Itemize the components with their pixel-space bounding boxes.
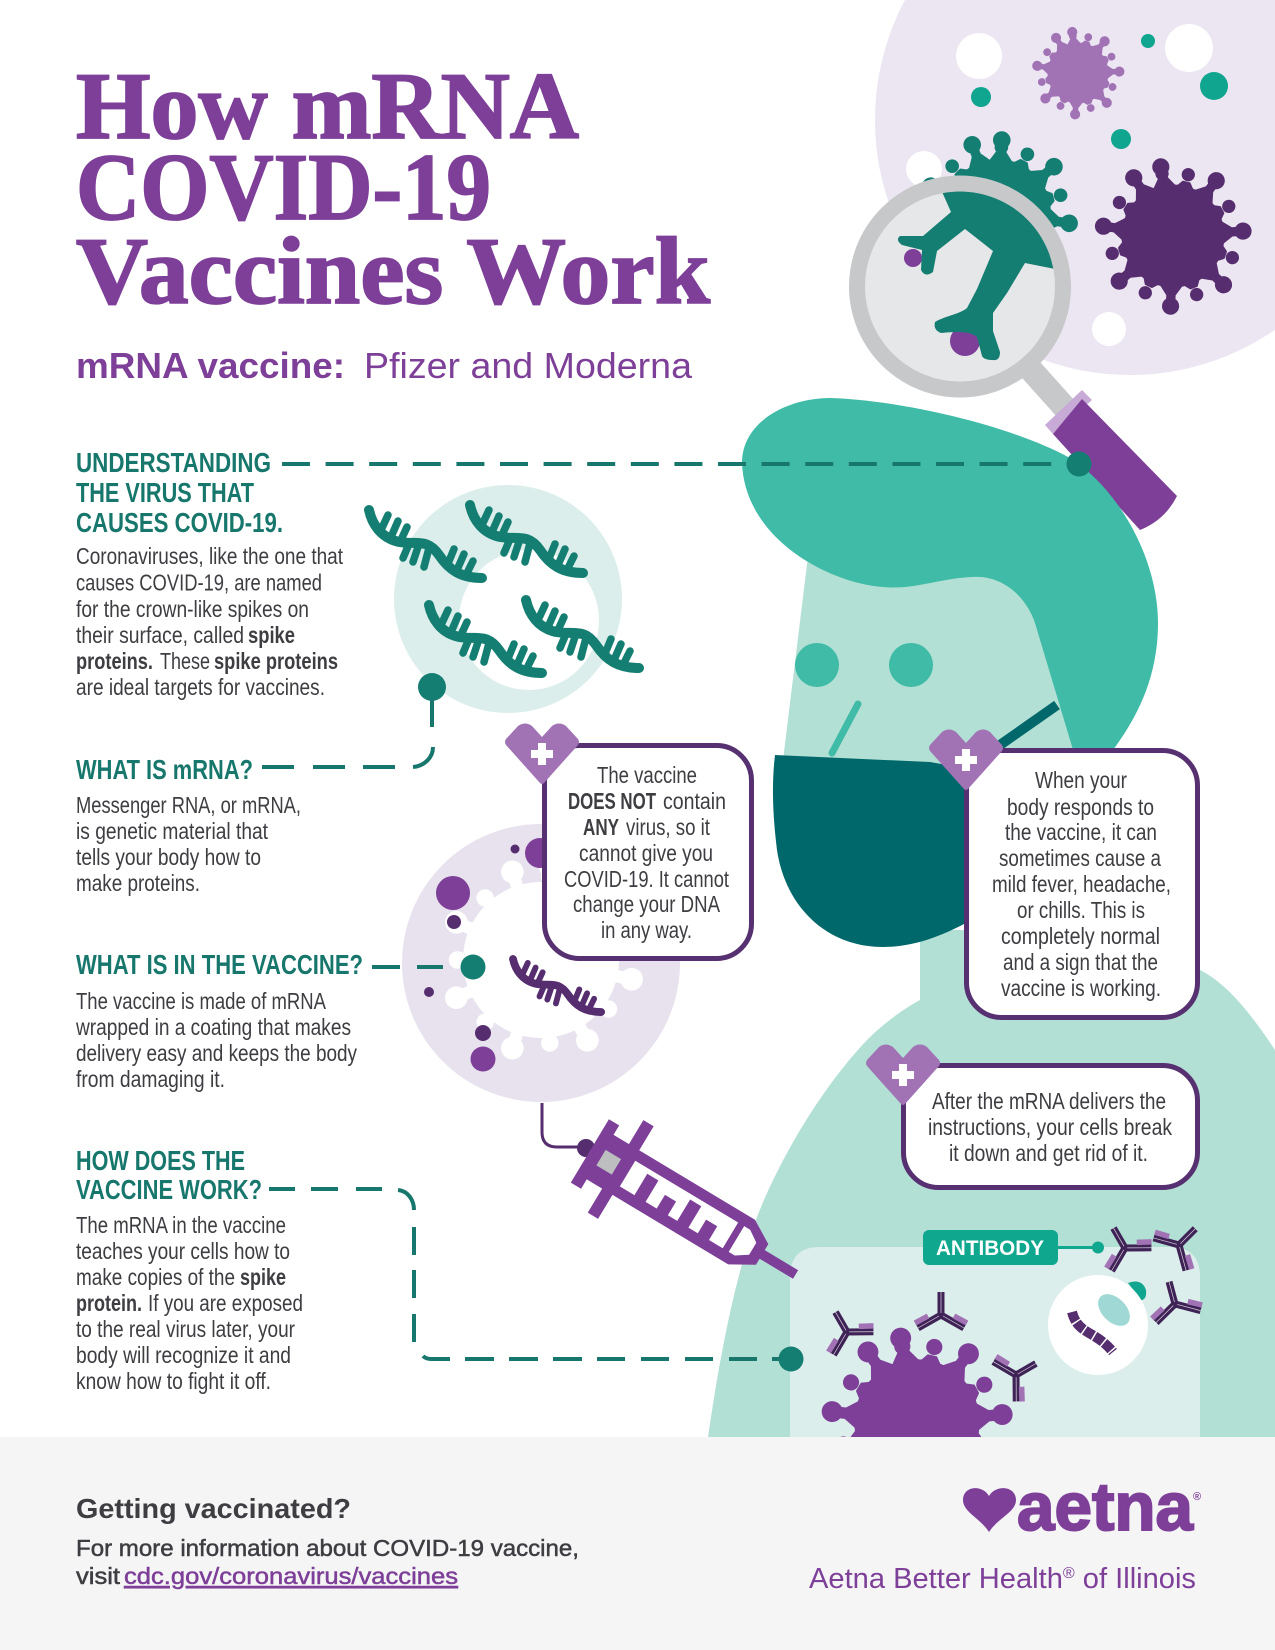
callout text: body responds to — [1007, 794, 1154, 820]
callout text — [992, 767, 1171, 1001]
title — [76, 53, 710, 324]
heading: UNDERSTANDING — [76, 447, 271, 478]
icon: cell with broken mRNA — [1048, 1275, 1148, 1375]
callout text: in any way. — [601, 917, 692, 943]
footer text: visit — [76, 1563, 121, 1589]
callout text: COVID-19. It cannot — [564, 866, 729, 892]
callout text: mild fever, headache, — [992, 871, 1171, 897]
callout text: completely normal — [1001, 923, 1160, 949]
illustration: vaccine particle cell — [402, 824, 680, 1102]
icon: antibody — [915, 1292, 967, 1328]
icon: antibody — [1091, 1215, 1154, 1272]
footer — [0, 1437, 1275, 1650]
body text: spike proteins — [214, 648, 338, 674]
footer text: cdc.gov/coronavirus/vaccines — [124, 1563, 458, 1589]
callout text: cannot give you — [579, 840, 713, 866]
body — [708, 930, 1275, 1437]
icon: heart with cross — [505, 724, 579, 784]
callout text: instructions, your cells break — [928, 1114, 1172, 1140]
body text: for the crown-like spikes on — [76, 596, 309, 622]
body text: teaches your cells how to — [76, 1238, 290, 1264]
magnifier behind hair — [857, 184, 1177, 530]
title: Vaccines Work — [76, 218, 710, 324]
heading: VACCINE WORK? — [76, 1174, 262, 1205]
body text: These — [160, 648, 210, 674]
heading: HOW DOES THE — [76, 1145, 245, 1176]
section: what is mRNA — [76, 754, 301, 896]
organization name: ® — [1063, 1565, 1075, 1582]
icon: purple virus at bottom — [804, 1309, 1031, 1536]
callout text: When your — [1035, 767, 1127, 793]
callout text: sometimes cause a — [999, 845, 1161, 871]
body text: from damaging it. — [76, 1066, 225, 1092]
body text: make copies of the — [76, 1264, 235, 1290]
body text: protein. — [76, 1290, 142, 1316]
body text: make proteins. — [76, 870, 200, 896]
heading — [76, 1145, 262, 1205]
illustration: mRNA strands in circle — [369, 485, 639, 713]
body text: Coronaviruses, like the one that — [76, 543, 343, 569]
callout text: ANY — [583, 814, 619, 840]
figure: person with mask — [708, 184, 1275, 1437]
hair — [742, 398, 1158, 750]
subtitle — [76, 345, 693, 386]
callout text — [564, 762, 729, 943]
section: understanding the virus — [76, 447, 343, 700]
eyes — [795, 643, 933, 687]
callout text: virus, so it — [626, 814, 710, 840]
heading: WHAT IS mRNA? — [76, 754, 253, 785]
background circle: lavender virus field — [875, 0, 1275, 375]
callout text: vaccine is working. — [1001, 975, 1161, 1001]
callout text: DOES NOT — [568, 788, 656, 814]
body text: The mRNA in the vaccine — [76, 1212, 286, 1238]
body text: spike — [240, 1264, 286, 1290]
body text: are ideal targets for vaccines. — [76, 674, 325, 700]
nose — [832, 704, 858, 753]
body text: their surface, called — [76, 622, 244, 648]
subtitle: mRNA vaccine: — [76, 345, 345, 386]
connector: how does the vaccine work dashed line — [269, 1189, 804, 1372]
mask strap — [1000, 705, 1057, 745]
icon: syringe — [562, 1105, 823, 1321]
body text: is genetic material that — [76, 818, 268, 844]
aetna logo: aetna — [1017, 1469, 1194, 1545]
callout text: change your DNA — [573, 891, 721, 917]
body text: delivery easy and keeps the body — [76, 1040, 357, 1066]
heading: WHAT IS IN THE VACCINE? — [76, 949, 363, 980]
heading: THE VIRUS THAT — [76, 477, 254, 508]
callout text: it down and get rid of it. — [949, 1140, 1148, 1166]
body text — [76, 792, 301, 896]
callout text: After the mRNA delivers the — [932, 1088, 1166, 1114]
section: what is in the vaccine — [75, 949, 363, 1092]
heading — [76, 447, 283, 538]
footer heading: Getting vaccinated? — [76, 1493, 351, 1524]
callout text: contain — [663, 788, 726, 814]
subtitle: Pfizer and Moderna — [364, 345, 693, 386]
footer text — [76, 1535, 579, 1589]
title: COVID-19 — [76, 134, 491, 240]
face — [783, 540, 1100, 850]
connector: what is mRNA dashed line — [262, 673, 446, 767]
connector: cell to syringe — [542, 1103, 595, 1157]
callout text: or chills. This is — [1017, 897, 1145, 923]
body text — [76, 543, 343, 700]
body text: If you are exposed — [148, 1290, 303, 1316]
organization name: of Illinois — [1075, 1563, 1196, 1595]
body text: to the real virus later, your — [76, 1316, 295, 1342]
body text: causes COVID-19, are named — [76, 570, 322, 596]
body text — [76, 1212, 303, 1394]
callout text: the vaccine, it can — [1005, 819, 1157, 845]
inner arm panel — [790, 1247, 1200, 1437]
callout: cells break it down — [866, 1044, 1198, 1188]
icon: heart with cross — [929, 730, 1003, 790]
aetna logo: ® — [1193, 1491, 1201, 1503]
heading: CAUSES COVID-19. — [76, 507, 283, 538]
callout text: The vaccine — [597, 762, 697, 788]
callout: does not contain virus — [505, 724, 752, 958]
connector: understanding dashed line — [282, 452, 1092, 476]
icon: antibody — [813, 1299, 876, 1356]
label: antibody: ANTIBODY — [936, 1237, 1044, 1260]
footer text: For more information about COVID-19 vaccine, — [76, 1535, 579, 1561]
callout text — [928, 1088, 1172, 1166]
icon: antibody — [1144, 1275, 1203, 1323]
face mask — [773, 755, 975, 947]
callout text: and a sign that the — [1003, 949, 1158, 975]
body text: tells your body how to — [76, 844, 261, 870]
label: antibody — [923, 1230, 1104, 1265]
body text: body will recognize it and — [76, 1342, 291, 1368]
title: How mRNA — [76, 53, 579, 159]
body text: spike — [248, 622, 295, 648]
icon: antibody — [992, 1341, 1049, 1404]
icon: dark purple virus — [1081, 145, 1265, 328]
callout: body response — [929, 730, 1198, 1018]
organization name: Aetna Better Health — [809, 1563, 1062, 1595]
body text: wrapped in a coating that makes — [75, 1014, 351, 1040]
body text: proteins. — [76, 648, 153, 674]
icon: antibody — [1151, 1210, 1214, 1273]
body text: The vaccine is made of mRNA — [76, 988, 327, 1014]
body text — [75, 988, 357, 1092]
icon: teal virus — [913, 127, 1084, 298]
icon: light purple virus — [1025, 20, 1131, 126]
body text: Messenger RNA, or mRNA, — [76, 792, 301, 818]
connector: what is in the vaccine dashed line — [372, 954, 486, 980]
body text: know how to fight it off. — [76, 1368, 271, 1394]
section: how does the vaccine work — [76, 1145, 303, 1394]
icon: heart with cross — [866, 1044, 940, 1105]
